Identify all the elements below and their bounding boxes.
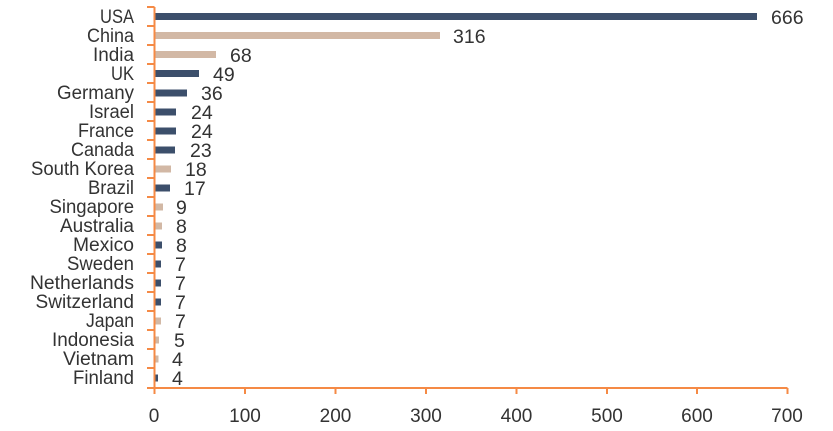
- value labels: 68: [230, 45, 252, 67]
- x-axis labels: 0: [149, 406, 159, 427]
- country labels: Vietnam: [63, 349, 134, 370]
- x-axis labels: 200: [320, 406, 351, 427]
- value labels: 24: [191, 102, 213, 124]
- value labels: [172, 7, 804, 390]
- country labels: China: [87, 26, 134, 47]
- value labels: 7: [175, 273, 186, 295]
- country labels: UK: [111, 64, 134, 85]
- country labels: Mexico: [73, 235, 134, 256]
- value labels: 316: [453, 26, 486, 48]
- value labels: 8: [176, 216, 187, 238]
- x-axis labels: [149, 406, 803, 427]
- x-axis labels: 700: [771, 406, 803, 427]
- country labels: South Korea: [31, 159, 134, 180]
- value labels: 17: [184, 178, 206, 200]
- value labels: 4: [172, 368, 183, 390]
- bars: [155, 13, 757, 382]
- value labels: 18: [185, 159, 207, 181]
- country labels: Australia: [60, 216, 134, 237]
- country labels: Israel: [89, 102, 134, 123]
- country labels: Finland: [73, 368, 134, 389]
- value labels: 49: [213, 64, 235, 86]
- value labels: 9: [176, 197, 187, 219]
- value labels: 5: [174, 330, 185, 352]
- value labels: 24: [191, 121, 213, 143]
- value labels: 23: [190, 140, 212, 162]
- country labels: Netherlands: [30, 273, 134, 294]
- x-axis labels: 500: [591, 406, 623, 427]
- value labels: 7: [175, 254, 186, 276]
- country labels: Japan: [86, 311, 134, 332]
- country labels: India: [93, 45, 134, 66]
- country labels: Sweden: [67, 254, 134, 275]
- value labels: 7: [175, 292, 186, 314]
- country labels: [30, 7, 134, 389]
- x-axis labels: 400: [501, 406, 532, 427]
- country labels: Canada: [71, 140, 134, 161]
- country labels: Germany: [57, 83, 134, 104]
- value labels: 4: [172, 349, 183, 371]
- country labels: USA: [100, 7, 134, 28]
- country labels: Brazil: [88, 178, 134, 199]
- country labels: Singapore: [50, 197, 134, 218]
- country labels: Switzerland: [36, 292, 134, 313]
- value labels: 7: [175, 311, 186, 333]
- value labels: 36: [201, 83, 223, 105]
- axes: [147, 7, 788, 394]
- country labels: France: [78, 121, 134, 142]
- value labels: 8: [176, 235, 187, 257]
- x-axis labels: 300: [410, 406, 442, 427]
- value labels: 666: [771, 7, 804, 29]
- x-axis labels: 600: [681, 406, 713, 427]
- country labels: Indonesia: [52, 330, 134, 351]
- x-axis labels: 100: [229, 406, 261, 427]
